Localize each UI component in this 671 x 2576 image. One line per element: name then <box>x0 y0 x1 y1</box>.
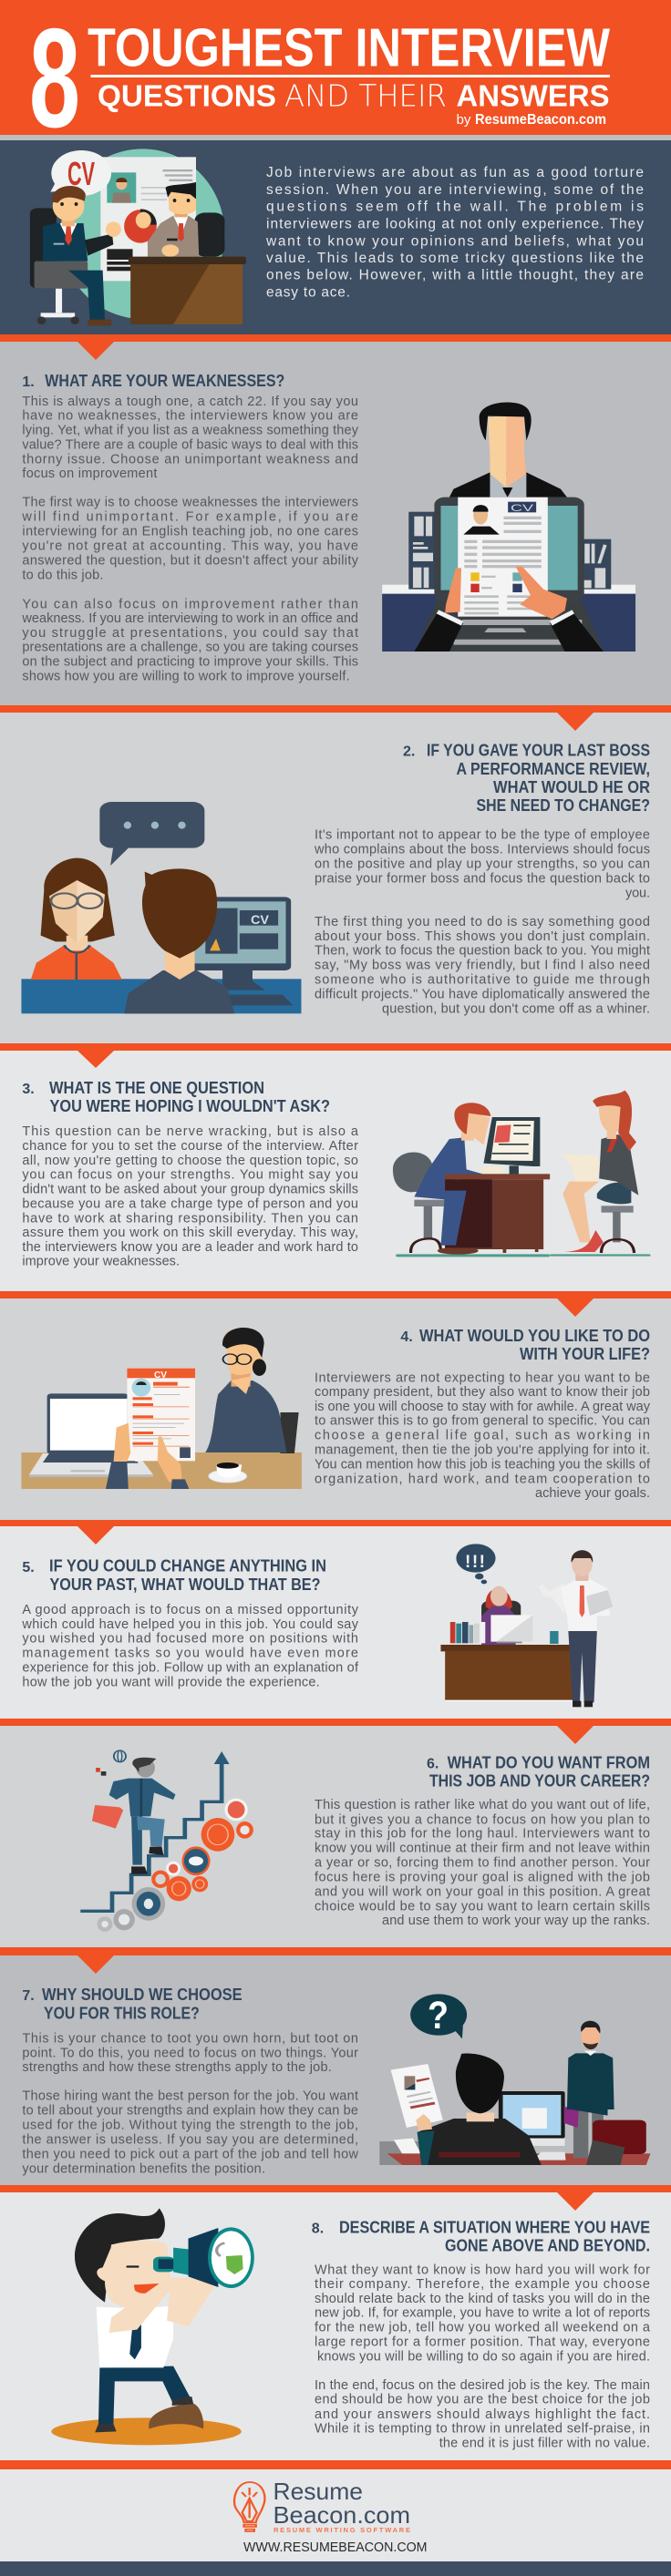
text: answer 6: but it gives you a chance to focus on how you plan to <box>315 1812 650 1827</box>
text: answer 1: This is always a tough one, a catch 22. If you say you <box>22 395 358 409</box>
heading: question 4: WHAT WOULD YOU LIKE TO DO <box>419 1327 650 1345</box>
question mark: ? <box>428 1994 449 2037</box>
illustration: man looking through a spyglass <box>51 2208 254 2445</box>
text: answer 7: your determination benefits the position. <box>22 2161 265 2176</box>
heading: question 2: SHE NEED TO CHANGE? <box>476 796 650 815</box>
divider arrow <box>0 1947 671 1955</box>
text: answer 2: praise your former boss and focus the question back to <box>315 872 650 887</box>
icon: speech bubble <box>99 802 204 866</box>
heading: question 6: 6. <box>427 1756 439 1771</box>
text: answer 4 <box>315 1370 651 1501</box>
text: answer 1: you're not great at accounting. This way, you have <box>22 539 358 554</box>
text: answer 1 <box>21 395 359 683</box>
text: answer 2: It's important not to appear to be the type of employee <box>315 828 650 843</box>
header banner <box>0 0 671 157</box>
heading: question 2: 2. <box>403 744 415 760</box>
text: answer 1: lying. Yet, what if you list as a weakness something they <box>22 424 359 438</box>
text: answer 1: interviewing for an English teaching job, no one cares <box>22 525 358 539</box>
heading: question 6: WHAT DO YOU WANT FROM <box>448 1753 650 1771</box>
text: answer 4: management, then tie the job you're applying for into it. <box>315 1442 650 1457</box>
title line 2: ANSWERS <box>456 78 609 113</box>
text: answer 2: difficult projects." You have diplomatically answered the <box>315 988 650 1002</box>
heading: question 6 <box>427 1753 650 1791</box>
text: answer 6: know you will continue at their firm and not leave within <box>315 1842 650 1856</box>
text: answer 8: new job. If, for example, you have to write a lot of reports <box>315 2306 650 2321</box>
website url: WWW.RESUMEBEACON.COM <box>243 2540 427 2555</box>
text: answer 8: What they want to know is how hard you will work for <box>315 2263 650 2277</box>
text: answer 2: you. <box>625 887 650 901</box>
illustration: recruiter reviewing a CV by a laptop <box>21 1328 302 1489</box>
text: answer 8: should relate back to the kind of tasks you will do in the <box>315 2292 650 2306</box>
text: answer 4: is one you will choose to stay with for awhile. A great way <box>315 1400 651 1414</box>
divider arrow <box>0 334 671 360</box>
divider arrow <box>0 1719 671 1726</box>
text: answer 1: answered the question, but it doesn't affect your ability <box>22 553 359 568</box>
title line 2 <box>98 78 609 113</box>
heading: question 5: IF YOU COULD CHANGE ANYTHING IN <box>49 1557 326 1575</box>
text: answer 3: because you are a take charge type of person and you <box>22 1196 358 1211</box>
text: answer 1: focus on improvement <box>22 467 157 481</box>
text: answer 3: you can focus on your strengths. You might say you <box>22 1168 358 1183</box>
text: answer 5: management tasks so you would have even more <box>22 1647 358 1661</box>
heading: question 5: YOUR PAST, WHAT WOULD THAT BE? <box>49 1575 321 1594</box>
heading: question 3: 3. <box>22 1082 35 1097</box>
byline: by <box>456 112 471 128</box>
text: answer 7 <box>22 2031 359 2176</box>
title line 2: QUESTIONS <box>98 78 276 113</box>
heading: question 7 <box>22 1986 243 2022</box>
icon: thought bubble <box>456 1544 496 1584</box>
text: answer 1: The first way is to choose weaknesses the interviewers <box>22 496 358 510</box>
text: answer 7: used for the job. Without tying the strength to the job, <box>22 2118 358 2132</box>
text: answer 5 <box>21 1603 359 1689</box>
text: answer 2: who complains about the boss. Interviews should focus <box>314 843 650 857</box>
text: answer 5: how the job you want will provide the experience. <box>22 1675 320 1689</box>
intro paragraph: questions seem off the wall. The problem is <box>266 200 644 215</box>
text: answer 6: stay in this job for the long haul. Interviewers want to <box>315 1827 650 1842</box>
text: answer 1: weakness. If you are interviewing to work in an office and <box>21 611 358 626</box>
text: answer 7: then you need to pick out a part of the job and tell how <box>22 2147 359 2161</box>
text: answer 3: chance for you to set the course of the interview. After <box>22 1139 358 1154</box>
text: answer 8: While it is tempting to throw in unrelated self-praise, in <box>315 2422 650 2437</box>
illustration: worried woman at desk and manager <box>440 1544 613 1707</box>
text: answer 1: you struggle at presentations, you could say that <box>22 626 358 641</box>
text: answer 8: In the end, focus on the desired job is the key. The main <box>315 2378 650 2393</box>
heading: question 8: GONE ABOVE AND BEYOND. <box>445 2236 650 2254</box>
illustration: man at a desk and woman taking notes <box>393 1091 650 1257</box>
text: answer 2: say, "My boss was very friendly, but I find I also need <box>315 959 650 973</box>
intro paragraph: ones below. However, with a little thought, they are <box>266 268 644 283</box>
icon: question speech bubble <box>410 1994 467 2038</box>
text: answer 8: large report for a former position. That way, everyone <box>315 2335 650 2349</box>
title line 2: AND THEIR <box>284 78 447 113</box>
icon text: exclamation marks: !!! <box>465 1553 485 1572</box>
text: answer 6 <box>315 1798 650 1928</box>
intro paragraph: easy to ace. <box>266 285 350 301</box>
text: answer 4: company president, but they also want to know their job <box>315 1385 650 1400</box>
illustration: businessman climbing stairs past gears <box>80 1750 253 1932</box>
heading: question 3 <box>22 1079 330 1115</box>
heading: question 2: A PERFORMANCE REVIEW, <box>456 760 650 778</box>
text: answer 2: someone who is authoritative to guide me through <box>315 973 650 988</box>
text: answer 5: A good approach is to focus on a missed opportunity <box>22 1603 359 1617</box>
illustration: man holding a CV at a laptop <box>382 402 635 652</box>
illustration: hiring manager reviewing a resume <box>379 1994 650 2165</box>
panel: question 5 <box>0 1526 671 1719</box>
panel: question 3 <box>0 1051 671 1291</box>
text: answer 8: their company. Therefore, the example you choose <box>315 2277 650 2292</box>
text: answer 2: The first thing you need to do is say something good <box>315 915 650 929</box>
text: answer 4: to answer this is to go from general to specific. You can <box>315 1414 650 1429</box>
text: answer 7: to tell about your strengths and explain how they can be <box>22 2104 358 2119</box>
text: answer 3 <box>22 1124 359 1269</box>
divider arrow <box>0 1291 671 1298</box>
text: answer 3: the interviewers know you are a leader and work hard to <box>22 1240 358 1255</box>
divider arrow <box>0 2185 671 2192</box>
text: answer 6: a year or so, forcing them to find another person. Your <box>315 1856 650 1871</box>
text: answer 6: choice would be to say you want to learn certain skills <box>315 1899 650 1914</box>
text: answer 8 <box>315 2263 651 2451</box>
panel: question 7 <box>0 1955 671 2185</box>
text: answer 4: You can mention how this job is teaching you the skills of <box>315 1457 651 1472</box>
text: answer 4: choose a general life goal, such as working in <box>315 1429 650 1443</box>
text: answer 8: end should be how you are the best choice for the job <box>315 2393 650 2407</box>
text: answer 1: have no weaknesses, the interviewers know you are <box>22 409 358 424</box>
text: answer 2: about your boss. This shows you don't just complain. <box>315 929 650 944</box>
text: answer 6: and you will work on your goal in this position. A great <box>315 1884 650 1899</box>
heading: question 4: 4. <box>400 1329 413 1345</box>
text: answer 7: Those hiring want the best person for the job. You want <box>22 2089 358 2104</box>
icon: CV speech bubble text: CV <box>67 155 95 192</box>
heading: question 1: 1. <box>22 375 35 390</box>
text: answer 6: and use them to work your way up the ranks. <box>382 1914 650 1928</box>
panel: question 2 <box>0 713 671 1043</box>
logo wordmark <box>274 2478 410 2534</box>
text: answer 5: which could have helped you in this job. You could say <box>21 1617 359 1632</box>
text: answer 6: This question is rather like what do you want out of life, <box>315 1798 650 1812</box>
heading: question 2: WHAT WOULD HE OR <box>493 778 650 796</box>
heading: question 3: WHAT IS THE ONE QUESTION <box>49 1079 264 1097</box>
text: answer 1: to do this job. <box>22 568 103 582</box>
text: answer 5: you wished you had focused more on positions with <box>22 1631 358 1646</box>
text: answer 1: presentations are a challenge, so you are taking courses <box>22 641 358 655</box>
logo wordmark: RESUME WRITING SOFTWARE <box>274 2526 410 2534</box>
intro paragraph: session. When you are interviewing, some of the <box>266 182 644 198</box>
heading: question 4 <box>400 1327 650 1363</box>
text: answer 4: Interviewers are not expecting to hear you want to be <box>315 1370 650 1385</box>
heading: question 7: WHY SHOULD WE CHOOSE <box>42 1986 243 2004</box>
text: answer 2 <box>314 828 650 1016</box>
text: answer 3: improve your weaknesses. <box>22 1255 180 1269</box>
text: answer 3: This question can be nerve wracking, but is also a <box>22 1124 359 1139</box>
text: answer 1: shows how you are willing to work to improve yourself. <box>22 669 350 683</box>
text: answer 8: for the new job, tell how you worked all weekend on a <box>315 2321 651 2335</box>
text: answer 8: and your answers should always highlight the fact. <box>315 2407 650 2422</box>
intro paragraph: want to know your opinions and beliefs, what you <box>265 233 644 249</box>
intro paragraph: value. This leads to some tricky questions like the <box>266 251 644 266</box>
text: answer 3: have to work at sharing responsibility. Then you can <box>22 1211 358 1226</box>
panel: question 1 <box>0 342 671 705</box>
CV label: CV <box>154 1370 167 1380</box>
text: answer 7: strengths and how these strengths apply to the job. <box>22 2060 332 2075</box>
panel: introduction <box>0 140 671 334</box>
text: answer 2: on the positive and play up your strengths, so you can <box>315 857 650 872</box>
intro paragraph: interviewers are looking at not only experience. They <box>266 217 644 232</box>
heading: question 5 <box>22 1557 326 1594</box>
text: answer 7: point. To do this, you need to focus on two things. Your <box>22 2046 358 2060</box>
text: answer 5: experience for this job. Follow up with an explanation of <box>22 1660 359 1675</box>
logo wordmark: Beacon.com <box>274 2501 410 2529</box>
divider arrow <box>0 705 671 713</box>
heading: question 1: WHAT ARE YOUR WEAKNESSES? <box>45 372 284 390</box>
byline: ResumeBeacon.com <box>475 112 606 128</box>
divider arrow <box>0 1043 671 1051</box>
text: answer 7: the answer is useless. If you say you are determined, <box>22 2132 358 2147</box>
CV label on monitor: CV <box>251 912 270 927</box>
heading: question 2 <box>403 742 650 815</box>
illustration: two people in a job interview with CV <box>30 149 246 325</box>
text: answer 7: This is your chance to toot you own horn, but toot on <box>22 2031 358 2046</box>
heading: question 7: YOU FOR THIS ROLE? <box>44 2004 200 2022</box>
text: answer 3: assure them you work on this skill everyday. This way, <box>22 1226 358 1240</box>
CV label on resume: CV <box>511 503 534 514</box>
text: answer 8: knows you will be willing to do so again if you are hired. <box>317 2349 650 2364</box>
heading: question 3: YOU WERE HOPING I WOULDN'T ASK? <box>49 1097 330 1115</box>
text: answer 8: the end it is just filler with no value. <box>439 2437 650 2451</box>
text: answer 1: will find unimportant. For example, if you are <box>21 510 358 525</box>
panel: question 4 <box>0 1298 671 1520</box>
heading: question 8: 8. <box>312 2221 324 2236</box>
text: answer 2: question, but you don't come off as a whiner. <box>382 1001 650 1016</box>
text: answer 2: Then, work to focus the question back to you. You might <box>315 944 650 959</box>
text: answer 3: didn't want to be asked about your group dynamics skills <box>22 1183 358 1197</box>
text: answer 3: all, now you're getting to choose the question topic, so <box>22 1154 358 1168</box>
text: answer 1: thorny issue. Choose an unimportant weakness and <box>22 452 358 467</box>
panel: question 6 <box>0 1726 671 1947</box>
heading: question 7: 7. <box>22 1988 35 2004</box>
text: answer 4: organization, hard work, and team cooperation to <box>315 1472 650 1486</box>
text: answer 1: You can also focus on improvement rather than <box>22 597 358 611</box>
icon: stairs and arrow <box>80 1751 230 1911</box>
text: answer 1: value? There are a couple of basic ways to deal with this <box>22 437 358 452</box>
heading: question 4: WITH YOUR LIFE? <box>520 1345 650 1363</box>
intro paragraph: Job interviews are about as fun as a good torture <box>266 165 644 180</box>
big number 8: 8 <box>29 0 80 157</box>
text: answer 4: achieve your goals. <box>535 1486 650 1501</box>
logo wordmark: Resume <box>274 2478 363 2505</box>
illustration: woman interviewing a man at a computer <box>21 802 301 1013</box>
divider arrow <box>0 1520 671 1526</box>
text: answer 6: focus here is proving your goal is aligned with the job <box>315 1871 650 1885</box>
heading: question 5: 5. <box>22 1560 35 1575</box>
heading: question 8 <box>312 2218 650 2254</box>
text: answer 1: on the subject and practicing to improve your skills. This <box>22 655 358 670</box>
footer <box>0 2460 671 2576</box>
intro paragraph <box>265 165 644 301</box>
panel: question 8 <box>0 2192 671 2460</box>
icon: gears <box>98 1799 253 1932</box>
icon: lightbulb with pen nib logo <box>234 2482 264 2531</box>
